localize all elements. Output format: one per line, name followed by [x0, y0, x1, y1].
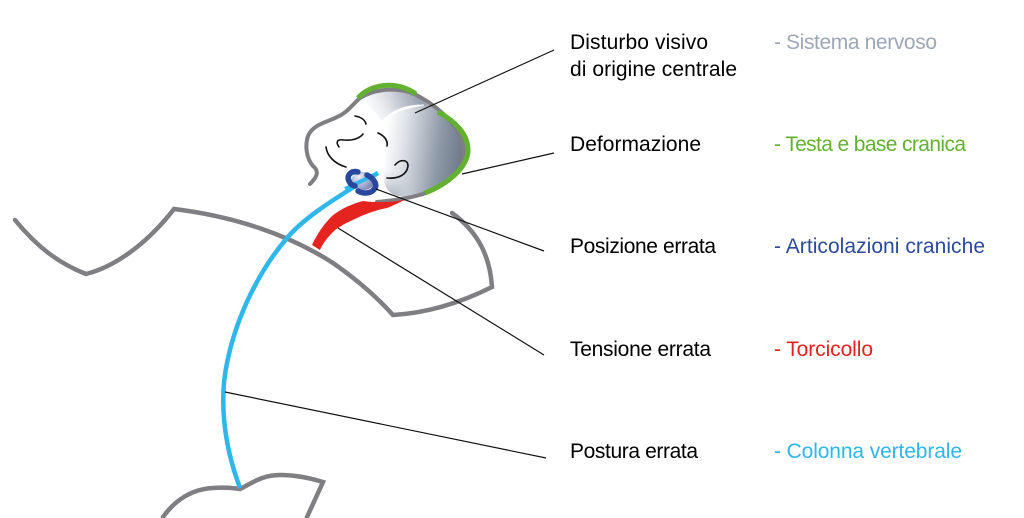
leader: Posizione errata [376, 189, 544, 251]
head shading [360, 90, 464, 197]
face details [326, 116, 408, 178]
head lower shading [384, 170, 423, 197]
category: Articolazioni craniche: - Articolazioni craniche [774, 235, 985, 258]
figure: body outline [15, 209, 492, 517]
head top shading [360, 90, 428, 121]
label: Disturbo visivo di origine centrale: di origine centrale [570, 58, 737, 81]
categories [774, 31, 985, 463]
closed eye [337, 134, 363, 147]
leader lines [225, 50, 554, 458]
green cranial outline, right [425, 112, 468, 193]
spine [223, 173, 378, 488]
spine top [345, 173, 378, 189]
leader: Disturbo visivo [415, 50, 554, 113]
category: Torcicollo: - Torcicollo [774, 338, 873, 361]
category: Colonna vertebrale: - Colonna vertebrale [774, 440, 962, 463]
ear [387, 161, 408, 178]
labels [570, 31, 737, 463]
head outline [306, 90, 464, 202]
label: Postura errata: Postura errata [570, 440, 698, 463]
leader: Deformazione [462, 153, 554, 174]
leader: Postura errata [225, 392, 546, 458]
joint centre [351, 172, 375, 190]
highlight [382, 105, 424, 121]
leader: Tensione errata [338, 228, 544, 355]
eye right [378, 133, 387, 146]
hip outline [163, 475, 323, 517]
blue ring [348, 172, 376, 193]
label: Tensione errata: Tensione errata [570, 338, 711, 361]
green cranial outline, top [358, 85, 416, 98]
arm and shoulder outline [15, 209, 492, 315]
neck muscle [312, 200, 405, 250]
eyebrow [355, 116, 366, 124]
cranial joint [345, 172, 378, 193]
category: Sistema nervoso: - Sistema nervoso [774, 31, 937, 54]
label: Posizione errata: Posizione errata [570, 235, 716, 258]
mouth [326, 147, 346, 167]
label: Deformazione: Deformazione [570, 133, 701, 156]
category: Testa e base cranica: - Testa e base cranica [774, 133, 966, 156]
figure: head [306, 85, 468, 202]
label: Disturbo visivo di origine centrale: Disturbo visivo [570, 31, 708, 54]
